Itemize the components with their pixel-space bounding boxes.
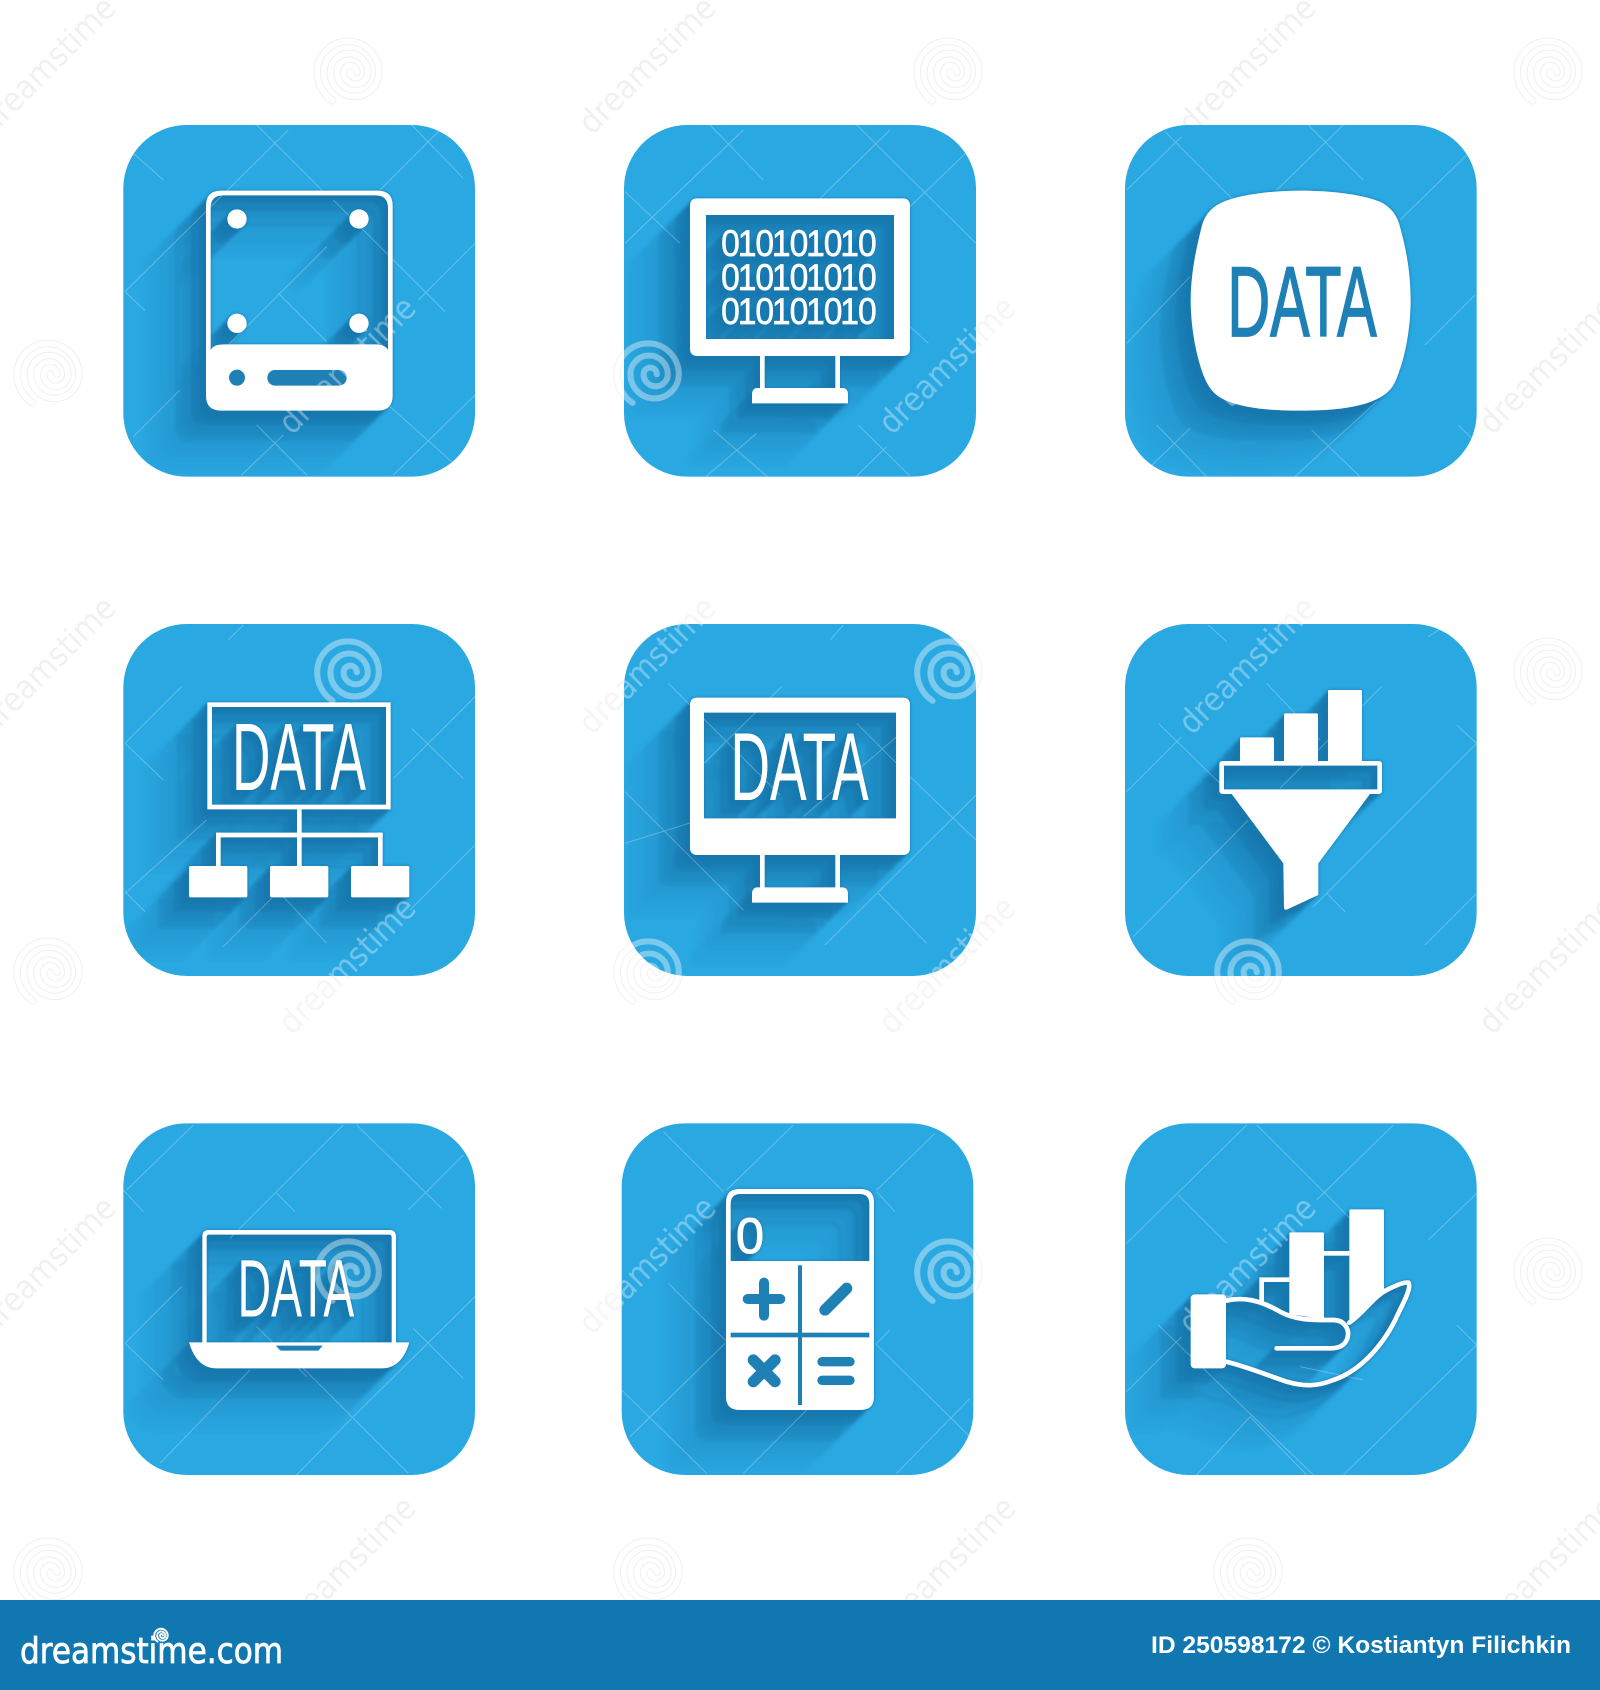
watermark: faint marks on white background: dreamstime: [1170, 1188, 1324, 1342]
icon: monitor with binary digits: 010101010: [721, 290, 877, 332]
watermark: faint marks on white background: dreamstime: [870, 288, 1024, 442]
watermark: translucent marks over tiles: dreamstime: [270, 888, 424, 1042]
watermark: faint marks on white background: dreamstime: [1170, 588, 1324, 742]
icon detail: laptop notch: [276, 1346, 323, 1351]
panel: data hierarchy tile: [123, 624, 475, 976]
watermark: translucent marks over tiles: dreamstime: [270, 288, 424, 442]
icon: data hierarchy diagram: DATA: [232, 705, 366, 811]
icon: monitor with binary digits: 010101010: [721, 222, 877, 264]
watermark: faint marks on white background: dreamstime: [870, 1488, 1024, 1642]
watermark: faint marks on white background: dreamstime: [270, 1488, 424, 1642]
panel: calculator tile: [622, 1123, 973, 1475]
icon: rounded badge: [1191, 191, 1411, 411]
icon: funnel filtering bar chart: [1219, 690, 1382, 910]
icon: hard drive: [206, 191, 393, 411]
panel: data funnel tile: [1125, 624, 1477, 976]
icon: data hierarchy diagram: [189, 702, 409, 897]
panel: hand with chart tile: [1125, 1123, 1477, 1475]
icon: calculator: 0: [736, 1208, 764, 1264]
footer bar: [0, 1600, 1600, 1690]
watermark: translucent marks over tiles: dreamstime: [870, 288, 1024, 442]
watermark: translucent marks over tiles: dreamstime: [1170, 588, 1324, 742]
icon: monitor with DATA label: [690, 698, 910, 903]
watermark: translucent marks over tiles: dreamstime: [1170, 1188, 1324, 1342]
badge label: DATA: [1227, 246, 1377, 357]
footer logo: dreamstime.com: [20, 1631, 283, 1672]
icon: hand holding bar chart: [1191, 1209, 1409, 1385]
icon: laptop with DATA label: [189, 1230, 409, 1368]
panel: DATA monitor tile: [624, 624, 976, 976]
watermark: translucent marks over tiles: dreamstime: [570, 588, 724, 742]
watermark: faint marks on white background: dreamstime: [570, 588, 724, 742]
watermark: faint marks on white background: dreamstime: [870, 888, 1024, 1042]
panel: DATA badge tile: [1125, 125, 1477, 477]
watermark: translucent marks over tiles: dreamstime: [870, 888, 1024, 1042]
icon: monitor with DATA label: DATA: [730, 713, 869, 821]
panel: hard drive tile: [123, 125, 475, 477]
watermark: translucent marks over tiles: dreamstime: [570, 1188, 724, 1342]
watermark: faint marks on white background: dreamstime: [570, 1188, 724, 1342]
icon: monitor with binary digits: [690, 198, 910, 403]
panel: laptop tile: [123, 1123, 475, 1475]
icon: laptop with DATA label: DATA: [238, 1244, 355, 1335]
footer credit: ID 250598172 © Kostiantyn Filichkin: [1151, 1632, 1571, 1659]
icon detail: drive indicator and slot: [229, 370, 347, 386]
watermark: faint marks on white background: dreamstime: [270, 888, 424, 1042]
panel: binary monitor tile: [624, 125, 976, 477]
watermark: translucent marks over tiles: [270, 288, 1324, 1342]
watermark: faint marks on white background: dreamstime: [270, 288, 424, 442]
icon: monitor with binary digits: 010101010: [721, 256, 877, 298]
icon detail: calculator keys: [731, 1265, 869, 1405]
icon: calculator: [726, 1189, 874, 1410]
